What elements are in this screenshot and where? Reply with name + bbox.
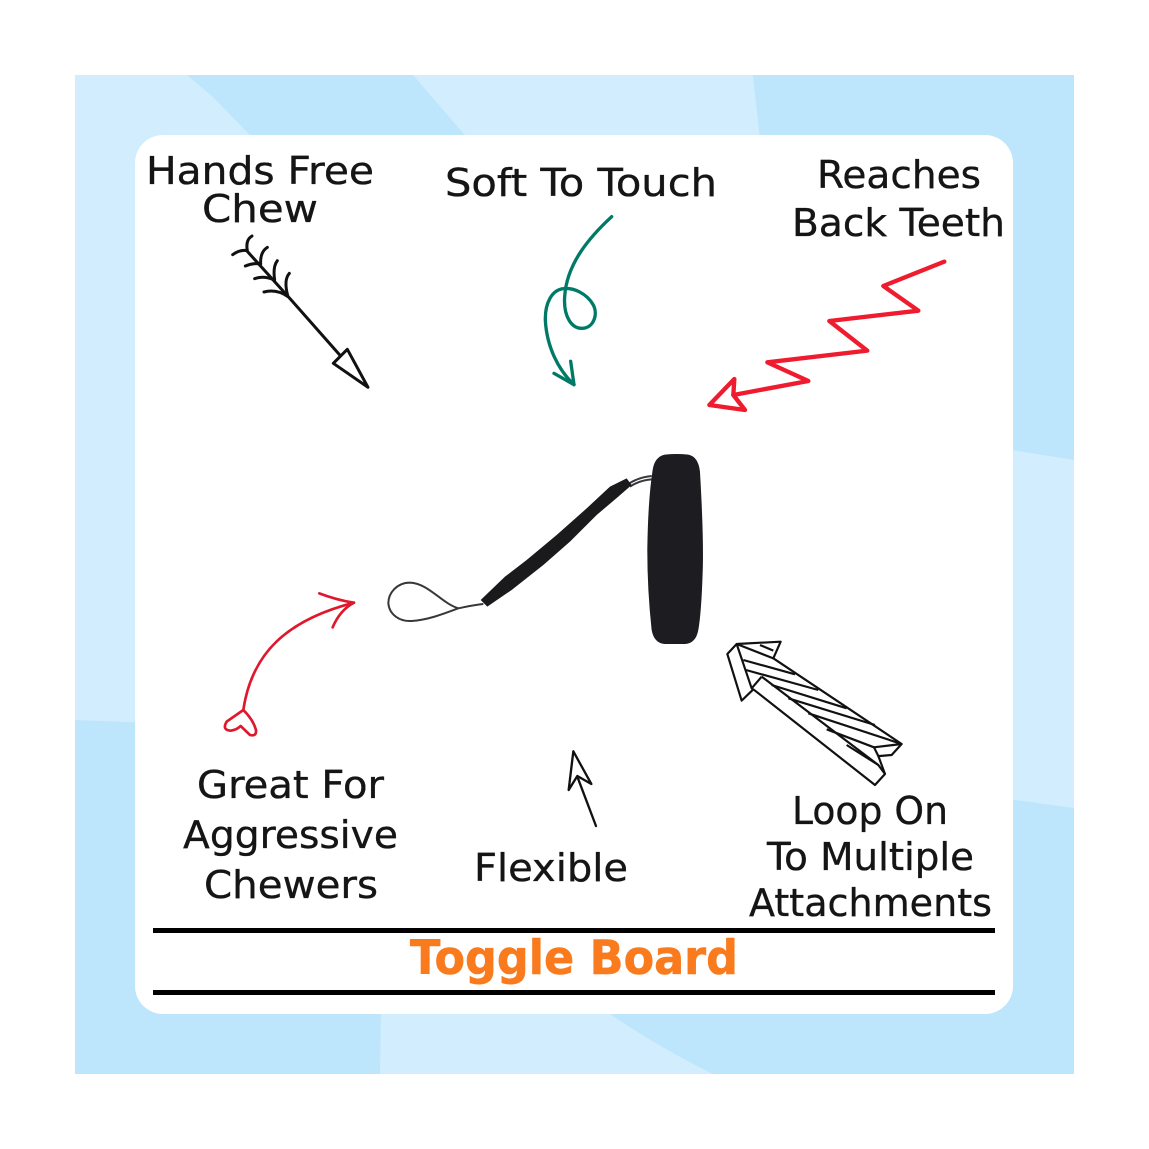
arrow: striped 3D arrow: [727, 642, 902, 785]
label: reaches back teeth: Back Teeth: [792, 201, 1005, 245]
label: hands free chew: [146, 149, 374, 231]
label: soft to touch: Soft To Touch: [445, 161, 717, 205]
label: loop on to multiple attachments: To Multiple: [766, 835, 974, 879]
label: great for aggressive chewers: Chewers: [204, 863, 378, 907]
arrow: red curved arrow: [225, 593, 354, 735]
arrow: black fletched arrow: [233, 236, 368, 387]
arrow: green loop arrow: [545, 217, 612, 385]
chew board: [647, 454, 703, 644]
label: loop on to multiple attachments: Loop On: [792, 789, 948, 833]
woven strap with clips: [481, 478, 632, 607]
label: hands free chew: Hands Free: [146, 149, 374, 193]
arrow: red zigzag arrow: [709, 262, 944, 410]
label: reaches back teeth: Reaches: [817, 153, 981, 197]
label: great for aggressive chewers: Aggressive: [183, 813, 398, 857]
label: reaches back teeth: [792, 153, 1005, 245]
label: loop on to multiple attachments: Attachments: [749, 881, 992, 925]
top rule: [153, 928, 995, 933]
blue background panel: [75, 75, 1074, 1074]
product: toggle board chew with strap: [388, 454, 703, 644]
label: hands free chew: Chew: [202, 187, 318, 231]
label: flexible: Flexible: [474, 846, 628, 890]
label: great for aggressive chewers: Great For: [197, 763, 384, 807]
white card: [135, 135, 1013, 1014]
title: Toggle Board: [410, 931, 738, 986]
bottom rule: [153, 990, 995, 995]
label: loop on to multiple attachments: [749, 789, 992, 925]
arrow: small black sketch arrow: [569, 751, 596, 826]
label: great for aggressive chewers: [183, 763, 398, 907]
cord and loop: [388, 476, 652, 621]
